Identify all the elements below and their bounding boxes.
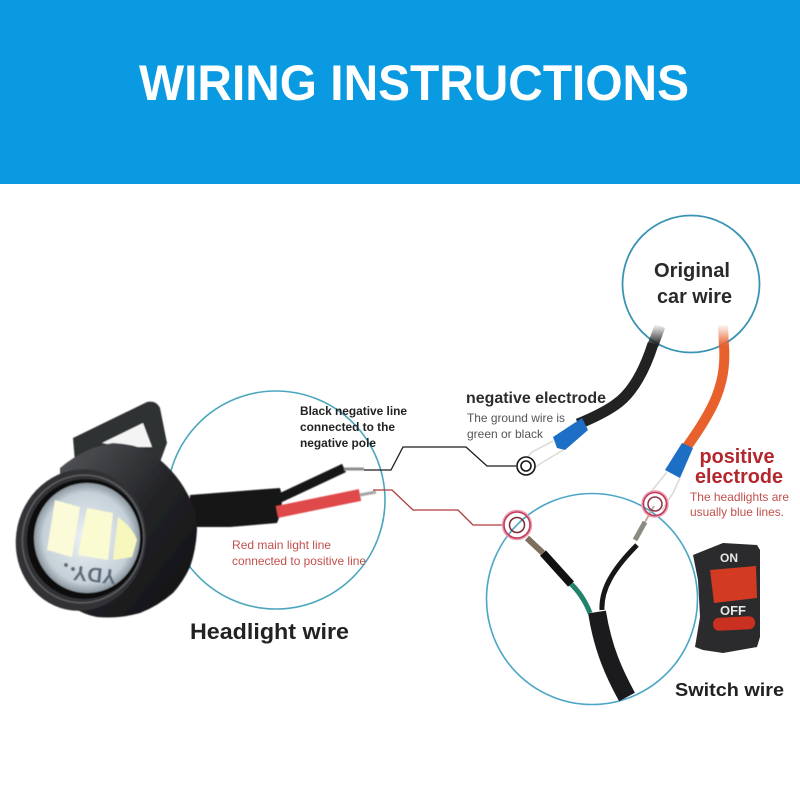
positive blue terminal [665,443,693,478]
circle: original car wire [622,216,760,352]
lamp inner ring [16,468,154,610]
label: original car wire: car wire [657,286,732,308]
label: black negative line: connected to the [300,422,395,434]
ring marker: right [642,492,668,516]
lens marking: YDY [72,561,118,588]
bracket opening [102,423,152,447]
title: WIRING INSTRUCTIONS [139,55,689,111]
label: positive electrode: electrode [695,466,783,488]
on label: ON [720,551,738,565]
black car wire fade [653,326,660,345]
negative fork terminal [527,441,563,468]
header banner [0,0,800,184]
lamp housing [60,443,197,618]
negative ring marker [517,457,535,475]
negative blue terminal [553,418,588,450]
left pin [527,538,543,553]
label: red main light line [232,538,366,568]
label: ground wire note [467,411,565,441]
label: headlights note: usually blue lines. [690,505,784,519]
black sheath [597,612,627,697]
shrink tube on green wire [543,553,571,584]
label: original car wire: Original [654,260,730,282]
positive fork terminal [650,472,680,510]
label: negative electrode: negative electrode [466,390,606,407]
black wire tip [344,468,364,470]
label: positive electrode: positive [700,446,774,468]
orange car wire fade [723,325,724,347]
switch body [693,543,760,653]
connector: black negative line [364,447,516,470]
label: ground wire note: The ground wire is [467,411,565,425]
lamp rim highlight [11,464,155,614]
label: black negative line: negative pole [300,438,376,450]
red wire [277,495,360,512]
label: headlight wire: Headlight wire [190,619,349,644]
label: ground wire note: green or black [467,427,544,441]
ring marker: left [503,511,531,539]
mounting bracket [73,402,167,462]
label: black negative line [300,406,407,450]
label: original car wire [654,260,732,308]
label: positive electrode [695,446,783,488]
label: headlights note: The headlights are [690,490,789,504]
off indicator [713,616,755,631]
LED chip 3 [113,517,137,560]
cable sheath [190,488,282,527]
icon: rocker switch [693,543,760,653]
label: switch wire: Switch wire [675,680,784,700]
right pin [635,522,645,540]
connector: red positive line [373,490,504,525]
switch wire harness [527,506,654,697]
green wire [570,583,590,613]
lens marking dots [64,563,75,571]
red wire tip [360,492,376,495]
lens [34,483,140,593]
circle: switch wire [486,494,698,704]
circle: headlight wire [167,391,385,609]
lamp front rim [3,457,159,623]
black wire run [578,344,653,424]
right pin tip [645,506,654,522]
LED chip 1 [47,500,80,557]
off label: OFF [720,603,746,618]
label: black negative line: Black negative line [300,406,407,418]
label: red main light line: Red main light line [232,538,331,552]
on button [710,566,757,603]
white and black wire [602,545,637,610]
label: red main light line: connected to positive line [232,554,366,568]
LED chip 2 [78,508,113,560]
icon: headlight assembly [3,402,376,623]
label: headlights note [690,490,789,519]
orange wire run [686,346,724,448]
black wire [280,468,344,498]
